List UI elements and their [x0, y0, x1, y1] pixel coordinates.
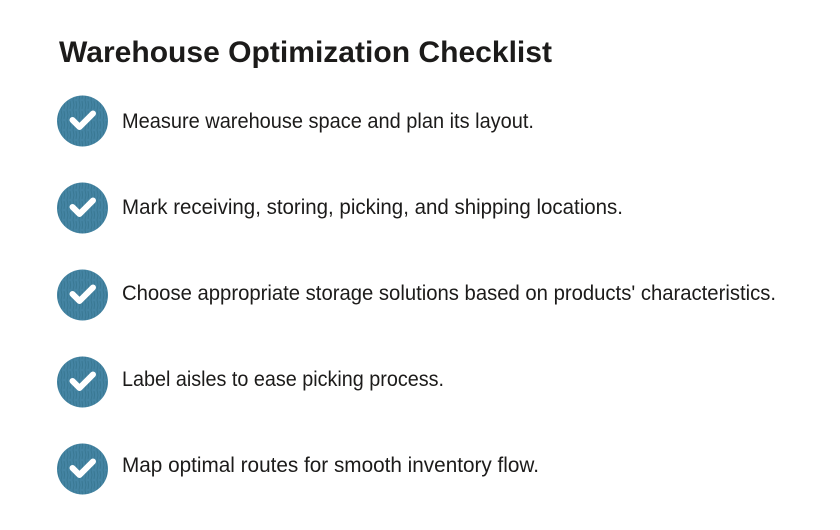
icon: check badge [57, 270, 108, 320]
icon: check badge [57, 356, 108, 408]
item text: Measure warehouse space and plan its layout. [122, 110, 534, 133]
item text: Mark receiving, storing, picking, and shipping locations. [122, 196, 623, 219]
item text: Map optimal routes for smooth inventory flow. [122, 454, 539, 477]
checklist item 2 [57, 182, 623, 234]
item text: Choose appropriate storage solutions based on products' characteristics. [122, 282, 776, 305]
icon: check badge [57, 182, 108, 234]
checklist item 3 [57, 270, 776, 320]
checklist item 4 [57, 356, 444, 408]
item text: Label aisles to ease picking process. [122, 368, 444, 391]
icon: check badge [57, 444, 108, 494]
title: Warehouse Optimization Checklist [59, 36, 552, 69]
checklist item 5 [57, 444, 539, 494]
checklist item 1 [57, 96, 534, 146]
icon: check badge [57, 96, 108, 146]
